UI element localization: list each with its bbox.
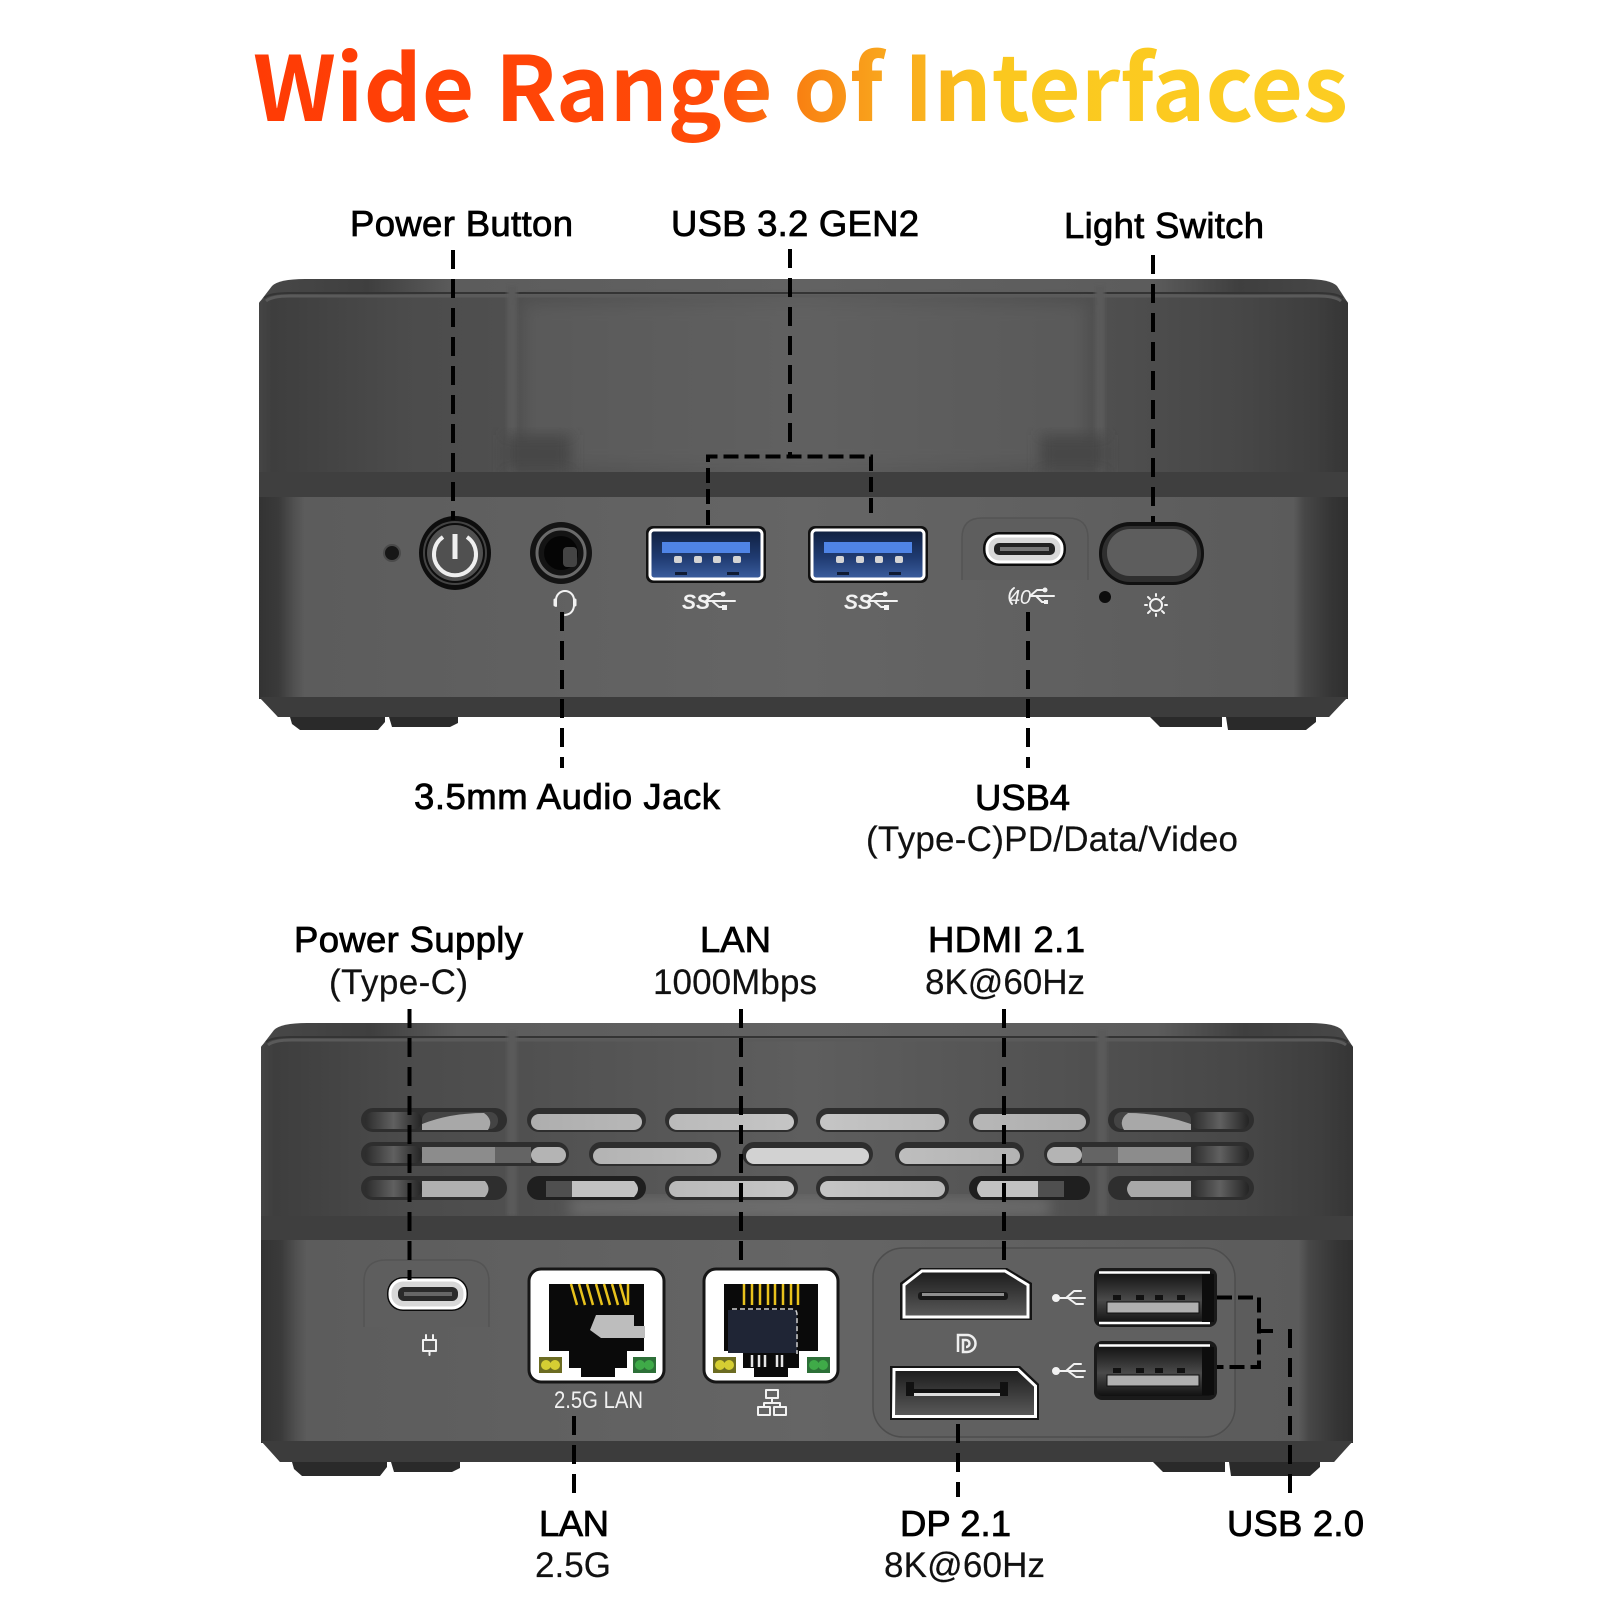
USB 2.0 port upper <box>1094 1268 1217 1327</box>
label: Power Supply: Power Supply <box>294 919 524 960</box>
status LED <box>384 545 400 561</box>
icon: USB trident upper <box>1053 1291 1085 1304</box>
vent row 3 <box>361 1176 1254 1200</box>
1000Mbps LAN port <box>704 1269 838 1382</box>
label: Light Switch: Light Switch <box>1064 205 1264 246</box>
audio jack <box>530 522 592 584</box>
icon: SS USB logo 2 <box>844 591 897 614</box>
label: 8K@60Hz DP: 8K@60Hz <box>884 1546 1045 1585</box>
icon: USB trident lower <box>1053 1364 1085 1377</box>
label: USB 3.2 GEN2: USB 3.2 GEN2 <box>671 203 919 244</box>
HDMI port <box>900 1268 1032 1320</box>
USB4 recess panel <box>962 518 1088 580</box>
vent row 2 <box>361 1142 1254 1166</box>
label: 8K@60Hz HDMI: 8K@60Hz <box>925 963 1085 1002</box>
label: 1000Mbps: 1000Mbps <box>653 963 817 1002</box>
label: DP 2.1: DP 2.1 <box>900 1503 1011 1544</box>
USB 3.2 port 2 <box>808 526 928 583</box>
icon: DisplayPort logo <box>958 1335 976 1352</box>
light indicator dot <box>1099 591 1111 603</box>
callout lines: bottom device <box>410 1009 1290 1498</box>
icon: SS USB logo 1 <box>682 591 735 614</box>
vent row 1 <box>361 1108 1254 1132</box>
icon: power plug <box>423 1335 436 1355</box>
title: Wide Range of Interfaces <box>253 17 1348 147</box>
label: 2.5G: 2.5G <box>535 1546 611 1585</box>
label: Type-C: (Type-C) <box>329 963 468 1002</box>
label: 3.5mm Audio Jack: 3.5mm Audio Jack <box>414 776 721 817</box>
icon: headset <box>555 591 575 615</box>
power button <box>419 516 491 590</box>
power supply type-C port <box>387 1277 468 1311</box>
2.5G LAN port <box>529 1269 664 1382</box>
case shell <box>259 279 1348 717</box>
label: USB 2.0: USB 2.0 <box>1227 1503 1364 1544</box>
rubber feet <box>290 717 1316 730</box>
USB 2.0 port lower <box>1094 1341 1217 1400</box>
icon: SS USB logo 1: SS <box>682 591 710 614</box>
rubber feet <box>292 1462 1320 1476</box>
case shell <box>261 1023 1353 1462</box>
label: LAN: LAN <box>700 919 771 960</box>
USB4 type-C port <box>983 532 1066 566</box>
light switch <box>1099 522 1204 585</box>
bottom device: rear panel <box>261 1023 1353 1476</box>
2.5G LAN silk label: 2.5G LAN <box>554 1387 643 1414</box>
label: Power Button: Power Button <box>350 203 573 244</box>
icon: 40 USB logo: 40 <box>1009 587 1031 609</box>
icon: network <box>758 1390 786 1415</box>
DP port <box>890 1366 1039 1420</box>
label: LAN lower: LAN <box>539 1503 609 1544</box>
label: HDMI 2.1: HDMI 2.1 <box>928 919 1085 960</box>
callout lines: top device <box>453 249 1153 768</box>
label: Type-C PD/Data/Video: (Type-C)PD/Data/Video <box>866 820 1238 859</box>
icon: sun <box>1145 594 1167 616</box>
top device: front panel <box>259 279 1348 730</box>
icon: SS USB logo 2: SS <box>844 591 872 614</box>
ventilation slots <box>361 1108 1254 1200</box>
USB 3.2 port 1 <box>646 526 766 583</box>
power supply recess panel <box>364 1260 489 1327</box>
label: USB4: USB4 <box>975 777 1070 818</box>
icon: 40 USB logo <box>1009 587 1054 609</box>
display and USB recess panel <box>873 1248 1235 1437</box>
